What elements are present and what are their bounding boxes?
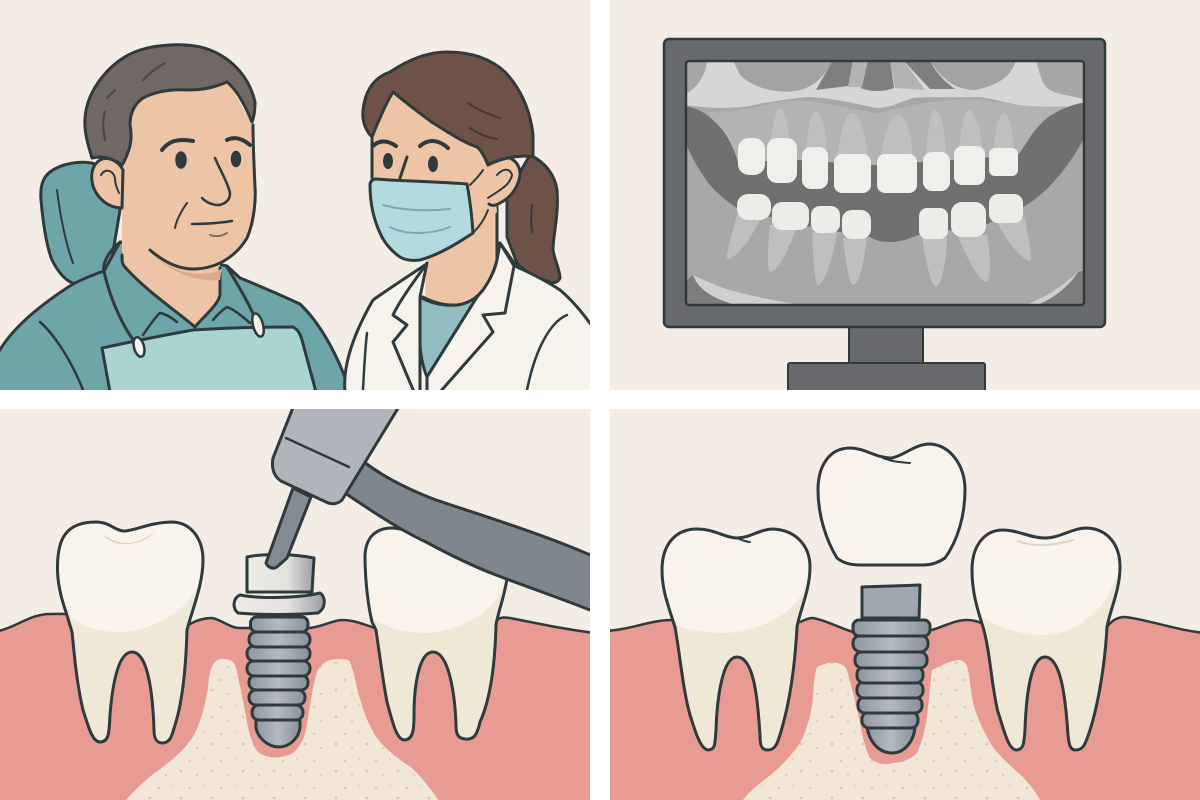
implant abutment and screw bbox=[853, 585, 930, 753]
surgical mask bbox=[370, 179, 473, 260]
icon: dental chair headrest bbox=[41, 162, 125, 284]
gum tissue bbox=[0, 614, 595, 800]
x-ray screen frame bbox=[686, 61, 1084, 305]
patient facial features bbox=[162, 138, 250, 236]
bib clips bbox=[132, 312, 266, 358]
jaw bone bbox=[743, 660, 1040, 800]
dentist ponytail bbox=[507, 155, 560, 283]
panel: consultation with dentist bbox=[0, 0, 592, 392]
right natural tooth bbox=[972, 528, 1120, 750]
implant screw with healing abutment bbox=[234, 554, 324, 747]
left natural tooth bbox=[662, 529, 810, 750]
upper teeth bbox=[738, 138, 1018, 193]
handpiece head bbox=[272, 405, 400, 504]
handpiece shaft bbox=[266, 488, 311, 568]
dark oral cavity shadow bbox=[685, 102, 1086, 242]
dentist hair bbox=[363, 52, 533, 165]
dentist face bbox=[374, 94, 497, 216]
panel: implant placement bbox=[0, 405, 595, 800]
tooth roots bbox=[727, 108, 1031, 287]
patient ear bbox=[92, 158, 123, 208]
patient face bbox=[122, 80, 255, 269]
dental handpiece bbox=[266, 405, 595, 612]
dentist scrubs bbox=[420, 297, 477, 377]
palate area bbox=[707, 99, 1067, 165]
patient neck bbox=[122, 210, 220, 325]
patient hair bbox=[85, 45, 255, 165]
dentist features and mask pleats bbox=[373, 141, 450, 233]
monitor bezel bbox=[664, 39, 1105, 327]
monitor stand bbox=[788, 325, 985, 393]
dentist ear bbox=[488, 157, 520, 205]
left natural tooth bbox=[57, 522, 203, 743]
floating crown bbox=[818, 444, 965, 565]
lower teeth bbox=[737, 194, 1023, 239]
upper bright bone band bbox=[687, 62, 1083, 108]
lower jaw border bbox=[693, 275, 800, 305]
right natural tooth bbox=[365, 528, 507, 740]
dentist neck bbox=[425, 214, 496, 304]
dentist coat bbox=[345, 243, 592, 392]
handpiece sleeve bbox=[345, 462, 595, 612]
patient shirt bbox=[0, 242, 350, 392]
panel: implant with crown bbox=[605, 409, 1200, 800]
sinus and nasal shadows bbox=[733, 60, 833, 92]
dentist figure bbox=[345, 52, 592, 392]
patient figure bbox=[0, 45, 350, 392]
jaw bone bbox=[126, 659, 438, 800]
gum tissue bbox=[605, 617, 1200, 800]
x-ray image bbox=[685, 60, 1086, 306]
panel: dental x-ray on monitor bbox=[610, 0, 1200, 393]
dentist lapels bbox=[393, 263, 427, 392]
dental bib bbox=[102, 327, 316, 392]
shirt collar bbox=[104, 242, 137, 345]
